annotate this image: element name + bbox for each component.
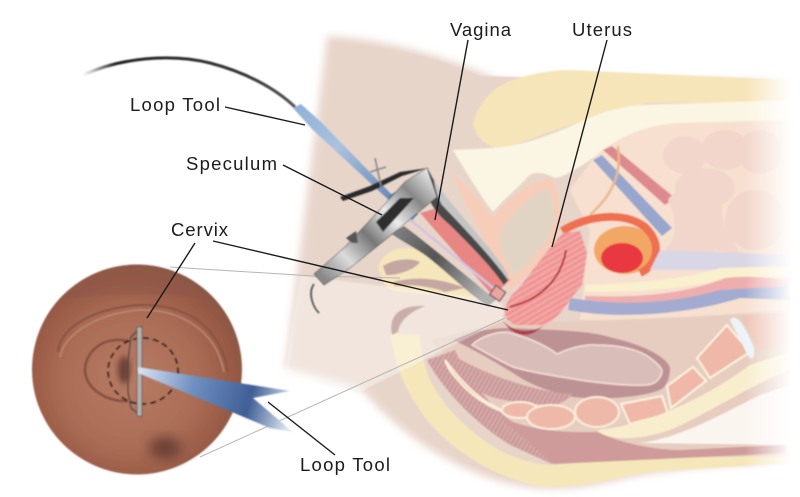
wire loop	[128, 327, 141, 416]
spine vertebrae	[621, 312, 790, 424]
dashed excision circle	[108, 338, 178, 404]
lower thumbscrew	[346, 231, 358, 243]
disc	[730, 318, 754, 358]
speculum	[311, 158, 437, 313]
white lower cavity	[640, 385, 790, 445]
lower shadow	[149, 437, 181, 459]
upper dark shade	[60, 272, 214, 300]
label: Cervix: Cervix	[171, 219, 229, 240]
yellow fat layer top	[473, 70, 790, 148]
vertebra 2	[667, 367, 706, 408]
mauve comma tissue	[391, 306, 425, 335]
intestines	[663, 130, 785, 258]
speculum upper blade highlight	[434, 180, 508, 280]
cervix dark base	[502, 320, 545, 335]
abdominal cavity	[570, 120, 790, 320]
label: Loop Tool lower: Loop Tool	[300, 454, 390, 475]
ovary and fallopian tube	[562, 217, 656, 274]
bowel outer mauve	[453, 328, 670, 398]
speculum upper lever	[340, 168, 428, 201]
label: Speculum: Speculum	[186, 153, 277, 174]
solid body core	[298, 42, 800, 485]
bowel inner lumen	[472, 332, 662, 385]
cream abdominal wall	[453, 100, 790, 212]
speculum lower blade	[390, 226, 496, 306]
red vessel	[603, 146, 675, 205]
vertebra 1	[621, 396, 668, 424]
lower yellow fat layer	[390, 333, 790, 487]
uterine canal curve	[510, 250, 566, 307]
blue vessel	[593, 155, 672, 236]
loop tip	[490, 285, 506, 301]
mauve labia	[383, 259, 420, 275]
upper vertebra	[742, 312, 790, 350]
perineal yellow tissue	[378, 248, 495, 302]
cord	[83, 58, 295, 107]
vertebra 3	[697, 325, 750, 378]
cream lower spinal band	[597, 352, 790, 438]
label: Vagina: Vagina	[450, 19, 512, 40]
ring highlight	[60, 310, 224, 372]
panel: pelvic cross-section anatomy	[285, 42, 800, 487]
speculum arm	[314, 168, 437, 285]
panel: magnified cervix view	[32, 264, 242, 474]
loop shaft inside canal	[408, 218, 497, 291]
ovary	[594, 226, 656, 274]
vaginal canal tissue	[420, 208, 510, 296]
scope circle	[32, 264, 242, 474]
speculum upper blade	[425, 168, 508, 285]
pink colon segments	[445, 360, 619, 429]
leader lines	[147, 40, 607, 455]
handle lower shaft	[388, 192, 418, 220]
upper thumbscrew	[370, 158, 386, 186]
lavender wash	[650, 250, 790, 270]
cervix fold	[85, 340, 128, 401]
pink tissue around bladder	[450, 170, 561, 290]
muscular pelvic floor band	[450, 353, 573, 405]
lower mauve tissue	[393, 279, 465, 292]
cervical os	[118, 356, 130, 384]
speculum hook	[311, 284, 319, 313]
body silhouette	[285, 36, 800, 489]
dark rectal lumen	[500, 417, 785, 464]
pelvic veins and cream bands	[568, 250, 790, 315]
label: Loop Tool upper: Loop Tool	[130, 94, 220, 115]
ureter	[590, 146, 619, 215]
inner ring	[58, 305, 228, 372]
handle	[293, 104, 395, 203]
uterus	[503, 231, 587, 325]
fallopian tube	[562, 217, 656, 273]
rectum outer wall	[427, 350, 552, 464]
pink band	[585, 277, 790, 304]
cream band	[585, 266, 790, 292]
loop tool in magnified view	[138, 367, 293, 432]
loop bar	[137, 327, 142, 416]
lower pelvic beige tissue	[430, 312, 790, 462]
right edge fade	[745, 0, 800, 497]
label: Uterus: Uterus	[572, 19, 632, 40]
labels	[130, 19, 632, 475]
bladder interior	[499, 188, 554, 276]
speculum window	[376, 198, 414, 232]
blue vein	[568, 286, 790, 315]
scope view connector lines	[170, 267, 505, 457]
blood vessels	[590, 146, 675, 236]
loop tool cord and handle	[83, 58, 418, 220]
translucent beam to scope view	[285, 276, 507, 391]
